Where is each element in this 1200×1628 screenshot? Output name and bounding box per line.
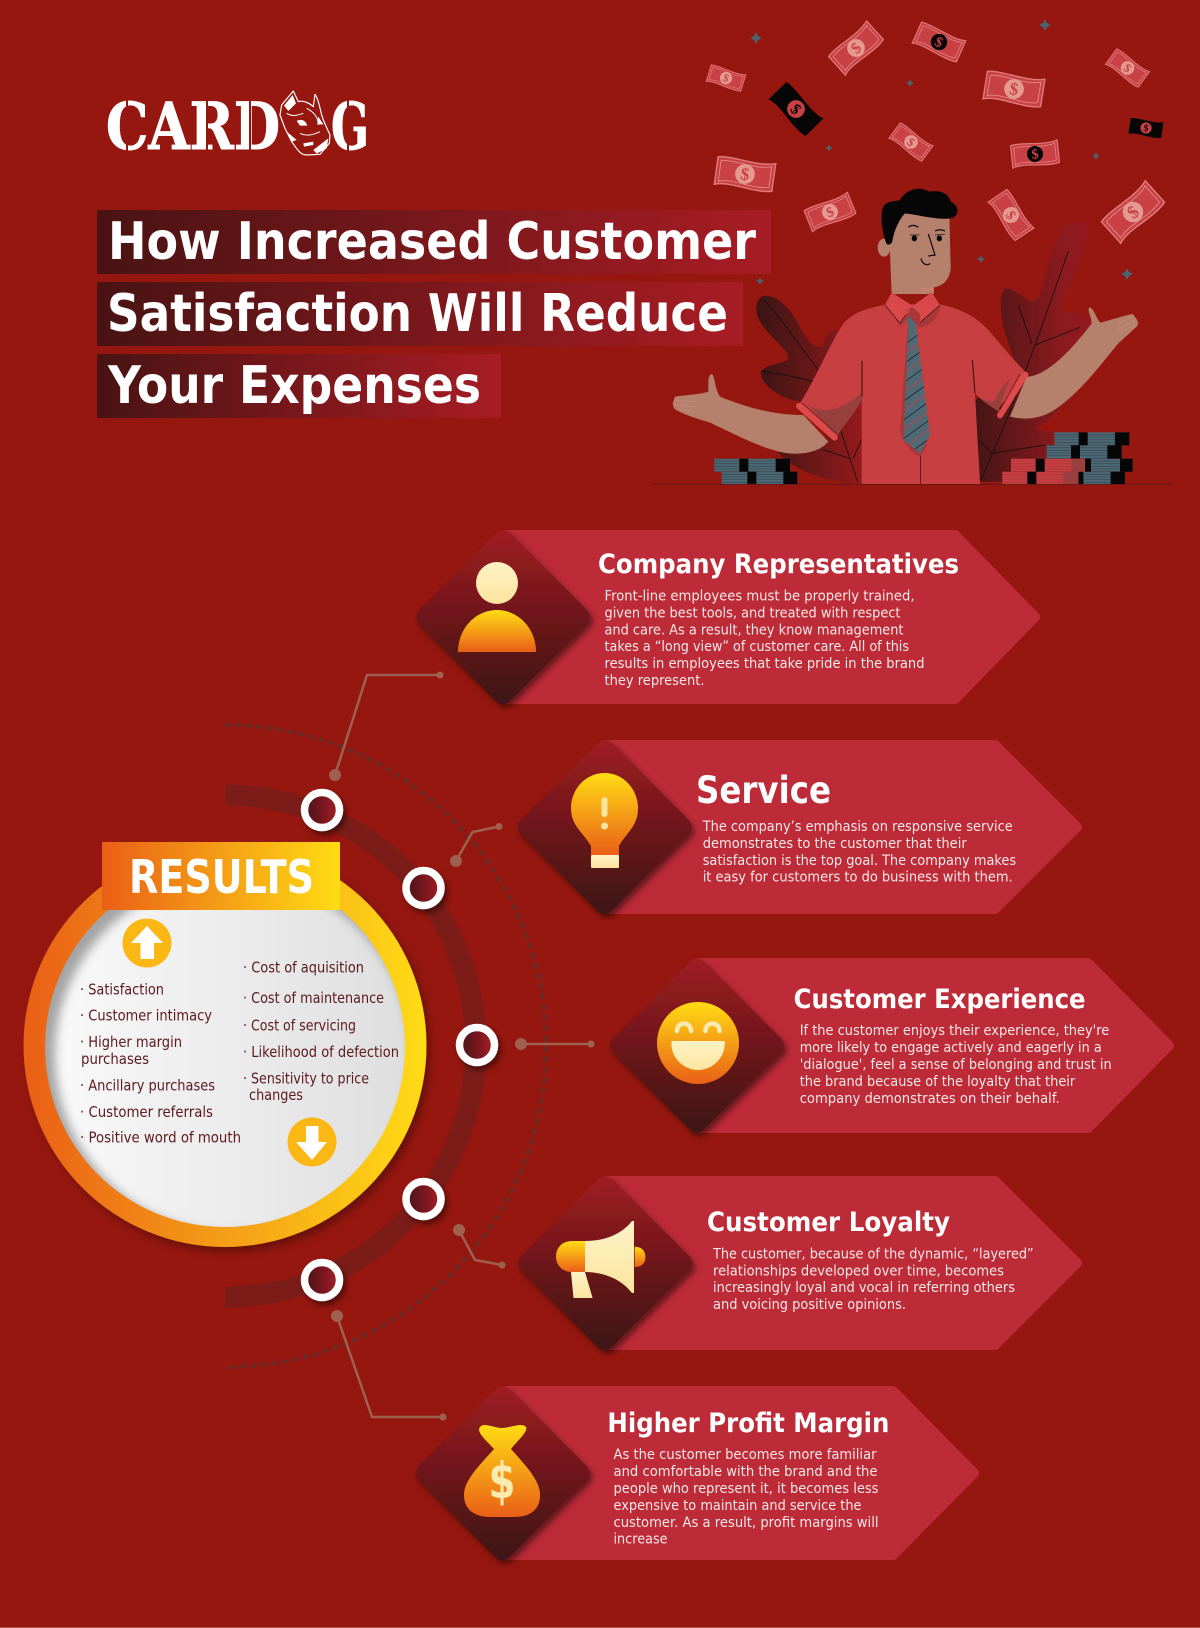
body text: the brand because of the loyalty that their (800, 1074, 1075, 1090)
icon: light bulb (571, 773, 638, 868)
man: neck and face (878, 213, 951, 294)
increases list: · Customer referrals (80, 1103, 213, 1121)
right plant (975, 221, 1090, 482)
coin stack left (714, 459, 797, 484)
illustration: falling money: $ (824, 204, 837, 221)
man: left arm (673, 374, 828, 454)
body text: they represent. (604, 673, 704, 689)
illustration: falling money: $ (1008, 78, 1020, 99)
decreases list: · Cost of aquisition (243, 959, 364, 977)
illustration: falling money: $ (904, 135, 918, 149)
body text: customer. As a result, profit margins will (614, 1515, 878, 1531)
body text: and care. As a result, they know management (604, 622, 904, 638)
connector 5 (331, 1310, 446, 1420)
increases list: · Ancillary purchases (80, 1076, 215, 1094)
heading: Service (696, 769, 831, 812)
body text: more likely to engage actively and eagerly in a (800, 1040, 1102, 1056)
increases list (80, 980, 241, 1147)
increases list: · Satisfaction (80, 980, 164, 998)
body text: people who represent it, it becomes less (614, 1481, 878, 1497)
man: finger lines (674, 317, 1135, 412)
body text: and voicing positive opinions. (713, 1297, 906, 1313)
illustration: falling money: $ (739, 163, 751, 184)
left plant (756, 296, 863, 484)
illustration: falling money: $ (787, 101, 804, 118)
title line 1: How Increased Customer (108, 212, 756, 272)
icon: megaphone (556, 1221, 645, 1298)
body text: results in employees that take pride in the brand (604, 656, 924, 672)
heading: Customer Loyalty (707, 1207, 950, 1238)
panel: company representatives (416, 530, 1035, 704)
man: shirt (799, 304, 1027, 484)
title line 2: Satisfaction Will Reduce (107, 284, 728, 344)
icon: down arrow (288, 1118, 336, 1166)
body text: it easy for customers to do business with them. (703, 870, 1013, 886)
connector 2 (450, 823, 502, 867)
body text: If the customer enjoys their experience, they're (800, 1023, 1109, 1039)
body text: Front-line employees must be properly trained, (604, 589, 914, 605)
increases list: · Higher margin (80, 1033, 182, 1051)
panel: results circle (24, 842, 426, 1247)
body text: As the customer becomes more familiar (614, 1447, 877, 1463)
diamond (610, 958, 784, 1132)
increases list: purchases (81, 1050, 149, 1068)
title line 3: Your Expenses (107, 356, 481, 416)
icon: money bag (464, 1425, 540, 1517)
body text (604, 589, 924, 689)
ground line (651, 483, 1172, 486)
body text: The company’s emphasis on responsive service (702, 819, 1013, 835)
body text: company demonstrates on their behalf. (800, 1091, 1060, 1107)
arc nodes (304, 792, 494, 1298)
outer ring (24, 844, 426, 1247)
panel: higher profit margin (416, 1386, 974, 1560)
illustration: sparkle stars (750, 19, 1133, 285)
body text (712, 1247, 1034, 1313)
illustration: falling money: $ (1143, 123, 1149, 135)
decreases list: changes (249, 1086, 303, 1104)
icon: smiley (657, 1002, 739, 1084)
results heading (102, 842, 340, 910)
panel: customer experience (610, 958, 1169, 1132)
illustration: falling money: $ (1123, 202, 1143, 222)
connector 4 (453, 1224, 506, 1268)
increases list: · Customer intimacy (80, 1006, 212, 1024)
title (97, 210, 771, 418)
icon: money bag: $ (488, 1452, 516, 1510)
connector lines (329, 672, 594, 1420)
illustration: falling money: $ (848, 39, 865, 57)
body text: and comfortable with the brand and the (614, 1464, 878, 1480)
body text: The customer, because of the dynamic, “layered” (712, 1247, 1034, 1263)
decreases list: · Sensitivity to price (243, 1069, 369, 1087)
body text (702, 819, 1016, 886)
logo: Cardog: CARD (106, 89, 280, 165)
logo: Cardog: G (331, 89, 369, 165)
dashed arc (225, 725, 546, 1367)
increases list: · Positive word of mouth (80, 1129, 241, 1147)
connector 3 (515, 1038, 594, 1050)
icon: up arrow (122, 918, 172, 968)
coin stack right (1002, 432, 1133, 484)
connector 1 (329, 672, 444, 781)
man: right arm (1010, 307, 1138, 419)
decreases list: · Likelihood of defection (243, 1043, 399, 1061)
illustration: falling money (706, 21, 1165, 243)
diamond (518, 1176, 692, 1350)
man: tie (903, 316, 930, 454)
inner disc (45, 908, 405, 1227)
heading: Customer Experience (794, 984, 1086, 1015)
illustration: businessman with plants and coin stacks (651, 189, 1172, 484)
illustration: falling money: $ (932, 34, 945, 52)
body text: demonstrates to the customer that their (703, 836, 967, 852)
body text (614, 1447, 878, 1548)
icon: person (458, 562, 536, 652)
decreases list (243, 959, 399, 1104)
diamond (416, 1386, 590, 1560)
diamond (518, 740, 692, 914)
body text: 'dialogue', feel a sense of belonging and trust in (800, 1057, 1112, 1073)
man: collar (885, 292, 941, 327)
body text: takes a “long view” of customer care. All of this (604, 639, 909, 655)
body text: increasingly loyal and vocal in referring others (713, 1280, 1015, 1296)
body text: relationships developed over time, becomes (713, 1264, 1004, 1280)
body text: expensive to maintain and service the (614, 1498, 862, 1514)
illustration: falling money: $ (721, 72, 731, 85)
body text: given the best tools, and treated with respect (604, 605, 901, 621)
panel: customer loyalty (518, 1176, 1077, 1350)
decreases list: · Cost of servicing (243, 1016, 356, 1034)
illustration: falling money: $ (1121, 61, 1134, 75)
illustration: falling money: $ (1002, 208, 1019, 223)
diamond (416, 530, 590, 704)
illustration: falling money: $ (1031, 146, 1039, 163)
heading: Company Representatives (598, 549, 959, 580)
results heading: RESULTS (129, 850, 314, 904)
heading: Higher Profit Margin (607, 1408, 889, 1439)
body text: increase (614, 1532, 668, 1548)
body text: satisfaction is the top goal. The company makes (703, 853, 1016, 869)
man: hair (882, 189, 957, 245)
decreases list: · Cost of maintenance (243, 989, 384, 1007)
thick arc (225, 795, 476, 1297)
panel: service (518, 740, 1077, 914)
body text (800, 1023, 1112, 1107)
